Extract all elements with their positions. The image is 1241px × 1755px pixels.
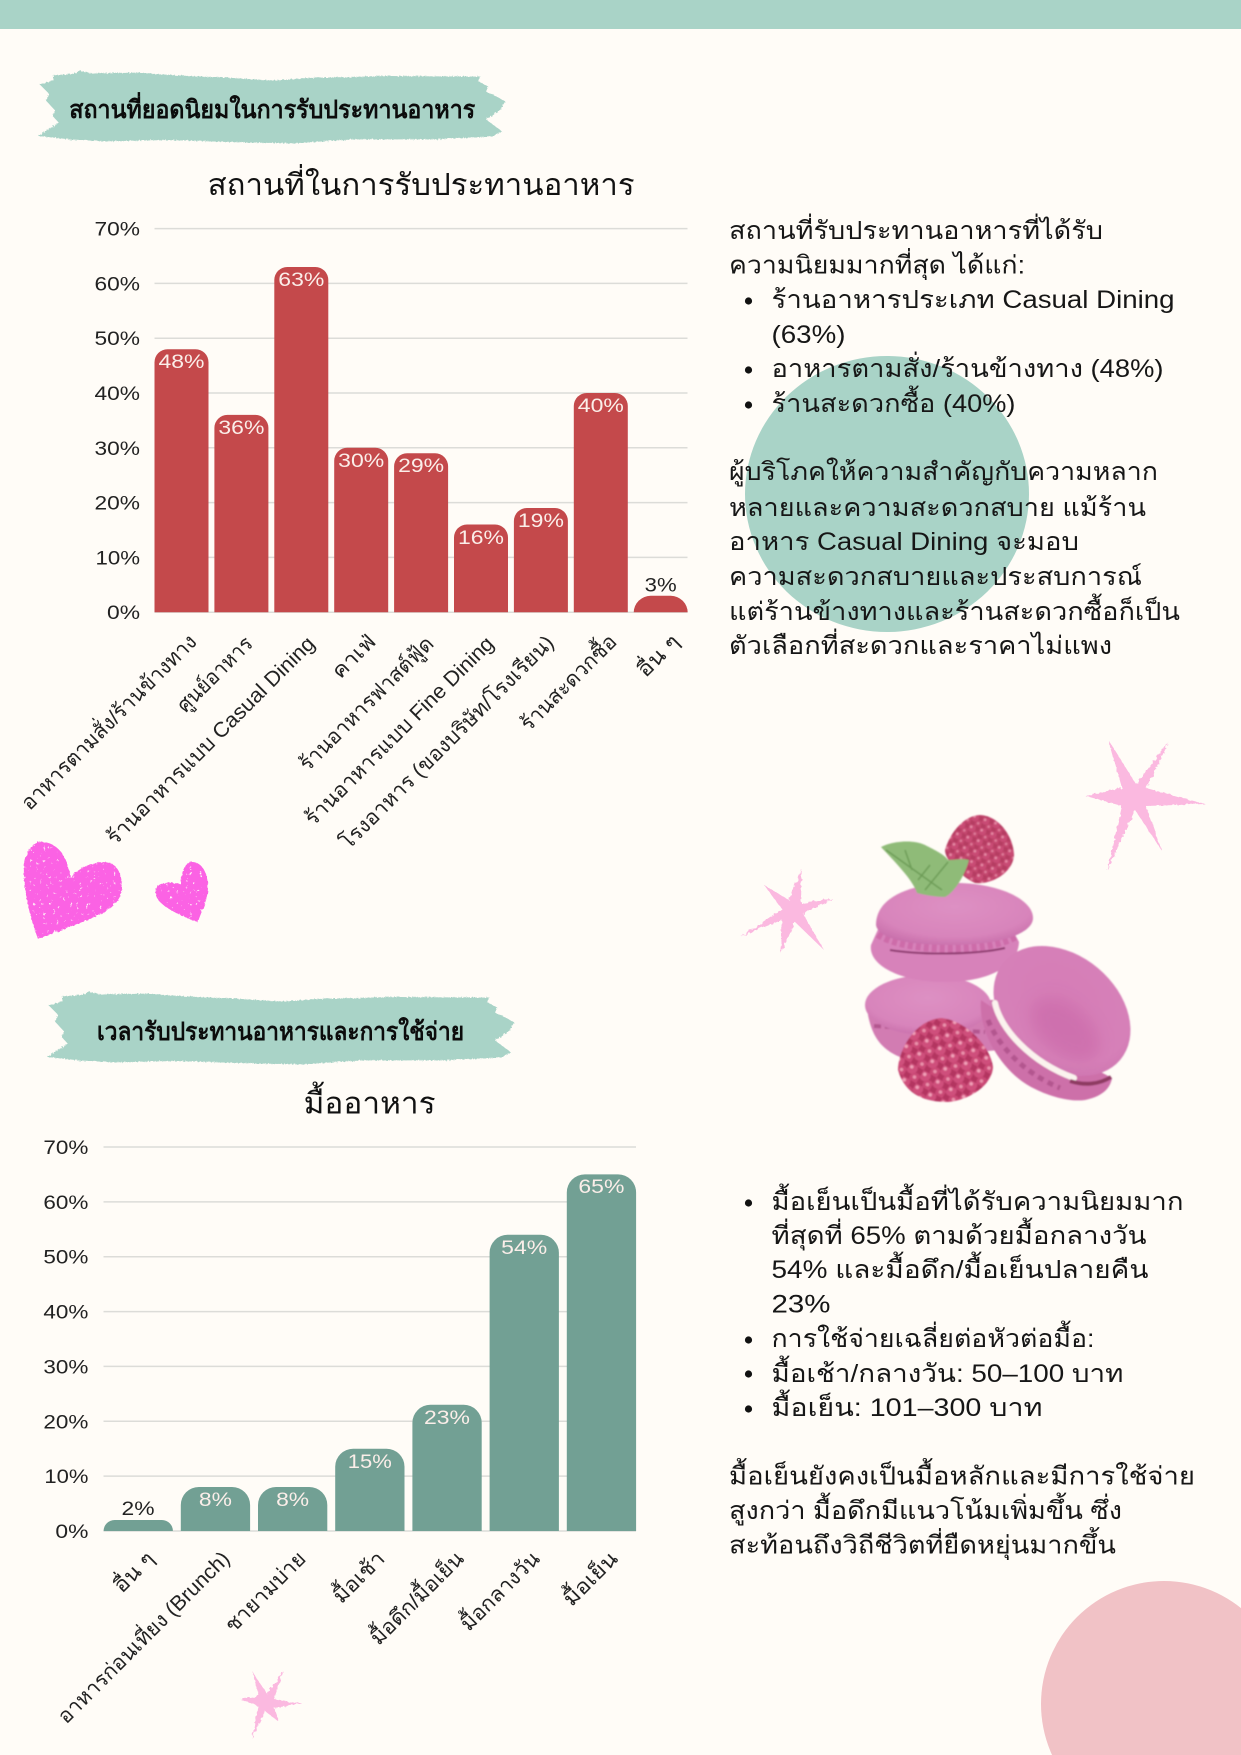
text block: popular places summary: หลายและความสะดวกสบาย แม้ร้าน bbox=[729, 494, 1146, 522]
bar chart: meals: 50% bbox=[43, 1248, 89, 1269]
bar chart: meals bbox=[43, 1138, 636, 1728]
bar chart: dining places: 70% bbox=[94, 220, 140, 241]
bar chart: meals: 54% bbox=[501, 1238, 547, 1259]
bar chart: dining places: 30% bbox=[94, 439, 140, 460]
icon: small heart bbox=[156, 862, 208, 922]
bar chart: meals: อาหารก่อนเที่ยง (Brunch) bbox=[51, 1544, 235, 1728]
bar chart: meals: มื้อกลางวัน bbox=[453, 1544, 545, 1636]
text block: meal summary: สะท้อนถึงวิถีชีวิตที่ยืดหยุ่นมากขึ้น bbox=[729, 1526, 1116, 1560]
raspberry: top bbox=[945, 815, 1014, 883]
bar chart: dining places: 36% bbox=[218, 418, 265, 439]
bar chart: meals: 70% bbox=[43, 1138, 89, 1159]
text block: meal summary bbox=[729, 1183, 1195, 1560]
text block: popular places summary: ความนิยมมากที่สุด ได้แก่: bbox=[729, 248, 1025, 280]
text block: meal summary: มื้อเย็นเป็นมื้อที่ได้รับความนิยมมาก bbox=[772, 1183, 1184, 1216]
bar chart: dining places: อาหารตามสั่ง/ร้านข้างทาง bbox=[14, 627, 202, 815]
text block: meal summary: การใช้จ่ายเฉลี่ยต่อหัวต่อมื้อ: bbox=[772, 1320, 1094, 1353]
bar chart: meals: 65% bbox=[578, 1177, 625, 1198]
raspberry: bottom bbox=[898, 1018, 993, 1102]
bar chart: dining places: 0% bbox=[107, 603, 140, 624]
icon: large sparkle star bbox=[1084, 740, 1205, 871]
bar chart: dining places: 40% bbox=[94, 384, 140, 405]
text block: popular places summary: ร้านอาหารประเภท Casual Dining bbox=[772, 286, 1174, 314]
text block: meal summary: มื้อเช้า/กลางวัน: 50–100 บาท bbox=[772, 1355, 1124, 1388]
bar chart: dining places: ร้านอาหารฟาสต์ฟู้ด bbox=[294, 632, 439, 777]
illustration: macarons and raspberries bbox=[865, 815, 1156, 1103]
text block: popular places summary bbox=[729, 213, 1180, 660]
text block: meal summary: มื้อเย็น: 101–300 บาท bbox=[772, 1389, 1042, 1422]
bar chart: meals: 0% bbox=[55, 1522, 89, 1543]
bar chart: meals: 40% bbox=[43, 1303, 89, 1324]
mint leaf bbox=[881, 841, 969, 897]
bar chart: meals: 20% bbox=[43, 1412, 89, 1433]
text block: meal summary: 54% และมื้อดึก/มื้อเย็นปลายคืน bbox=[772, 1251, 1148, 1284]
bar chart: dining places bbox=[14, 220, 688, 854]
bar chart: dining places: 3% bbox=[645, 576, 677, 596]
bar chart: meals: 23% bbox=[424, 1408, 470, 1429]
text block: popular places summary: อาหาร Casual Dining จะมอบ bbox=[729, 528, 1079, 556]
bar chart: dining places: 48% bbox=[158, 352, 205, 373]
bar chart: meals: มื้อเช้า bbox=[326, 1544, 390, 1608]
text block: meal summary: 23% bbox=[772, 1291, 830, 1319]
text block: popular places summary: สถานที่รับประทานอาหารที่ได้รับ bbox=[729, 213, 1103, 245]
bar chart: meals: มื้อเย็น bbox=[556, 1544, 623, 1611]
bar chart: dining places: 20% bbox=[94, 494, 140, 515]
bar chart: dining places: 29% bbox=[398, 456, 444, 477]
bar chart: meals: 2% bbox=[122, 1499, 155, 1520]
bar chart: meals: มื้อดึก/มื้อเย็น bbox=[363, 1544, 469, 1650]
text block: popular places summary: แต่ร้านข้างทางและร้านสะดวกซื้อก็เป็น bbox=[729, 593, 1180, 626]
chart title: meals: มื้ออาหาร bbox=[304, 1082, 436, 1120]
text block: meal summary: ที่สุดที่ 65% ตามด้วยมื้อกลางวัน bbox=[772, 1217, 1146, 1251]
text block: popular places summary: (63%) bbox=[772, 321, 846, 349]
top macaron bbox=[871, 883, 1033, 982]
text block: meal summary: สูงกว่า มื้อดึกมีแนวโน้มเพิ่มขึ้น ซึ่ง bbox=[729, 1492, 1122, 1526]
bar chart: dining places: 60% bbox=[94, 274, 140, 295]
bar chart: dining places: ร้านอาหารแบบ Casual Dining bbox=[102, 632, 320, 849]
bar chart: dining places: 63% bbox=[278, 270, 324, 291]
bar chart: meals: 10% bbox=[44, 1467, 89, 1488]
top banner bbox=[0, 0, 1241, 29]
bottom macaron bbox=[865, 975, 1000, 1058]
bar chart: dining places: คาเฟ่ bbox=[328, 630, 381, 683]
bar chart: dining places: 16% bbox=[458, 528, 504, 549]
bar chart: dining places: 50% bbox=[94, 329, 140, 350]
text block: popular places summary: อาหารตามสั่ง/ร้านข้างทาง (48%) bbox=[772, 351, 1164, 383]
bar chart: dining places: 19% bbox=[518, 511, 564, 532]
icon: bottom sparkle star bbox=[240, 1671, 303, 1739]
icon: small sparkle star bbox=[741, 869, 833, 954]
heading: popular dining places: สถานที่ยอดนิยมในการรับประทานอาหาร bbox=[69, 92, 476, 124]
text block: popular places summary: ร้านสะดวกซื้อ (40%) bbox=[772, 385, 1016, 418]
text block: popular places summary: ผู้บริโภคให้ความสำคัญกับความหลาก bbox=[729, 457, 1158, 487]
bar chart: meals: อื่น ๆ bbox=[107, 1544, 160, 1597]
text block: popular places summary: ความสะดวกสบายและประสบการณ์ bbox=[729, 563, 1142, 591]
bar chart: meals: 8% bbox=[276, 1490, 309, 1511]
bar chart: dining places: 10% bbox=[96, 548, 140, 569]
decorative circle: green bbox=[745, 356, 1029, 632]
bar chart: meals: ชายามบ่าย bbox=[221, 1547, 311, 1637]
bar chart: meals: 8% bbox=[199, 1490, 232, 1511]
icon: large heart bbox=[24, 842, 122, 939]
bar chart: dining places: โรงอาหาร (ของบริษัท/โรงเรียน) bbox=[335, 631, 559, 854]
heading: meal times and spending bbox=[47, 992, 514, 1064]
bar chart: dining places: ร้านสะดวกซื้อ bbox=[513, 627, 622, 736]
bar chart: meals: 30% bbox=[43, 1357, 89, 1378]
bar chart: dining places: อื่น ๆ bbox=[630, 627, 685, 682]
bar chart: meals: 60% bbox=[43, 1193, 89, 1214]
text block: popular places summary: ตัวเลือกที่สะดวกและราคาไม่แพง bbox=[729, 628, 1112, 660]
bar chart: dining places: 40% bbox=[578, 396, 624, 417]
bar chart: dining places: ศูนย์อาหาร bbox=[172, 632, 258, 718]
bar chart: dining places: ร้านอาหารแบบ Fine Dining bbox=[301, 632, 499, 830]
text block: meal summary: มื้อเย็นยังคงเป็นมื้อหลักและมีการใช้จ่าย bbox=[729, 1458, 1195, 1490]
chart title: dining places: สถานที่ในการรับประทานอาหาร bbox=[208, 164, 635, 202]
right macaron bbox=[968, 919, 1156, 1103]
heading: meal times and spending: เวลารับประทานอาหารและการใช้จ่าย bbox=[97, 1016, 464, 1046]
bar chart: meals: 15% bbox=[348, 1452, 392, 1473]
decorative circle: pink bbox=[1041, 1581, 1241, 1755]
heading: popular dining places bbox=[38, 71, 505, 143]
bar chart: dining places: 30% bbox=[338, 451, 384, 472]
